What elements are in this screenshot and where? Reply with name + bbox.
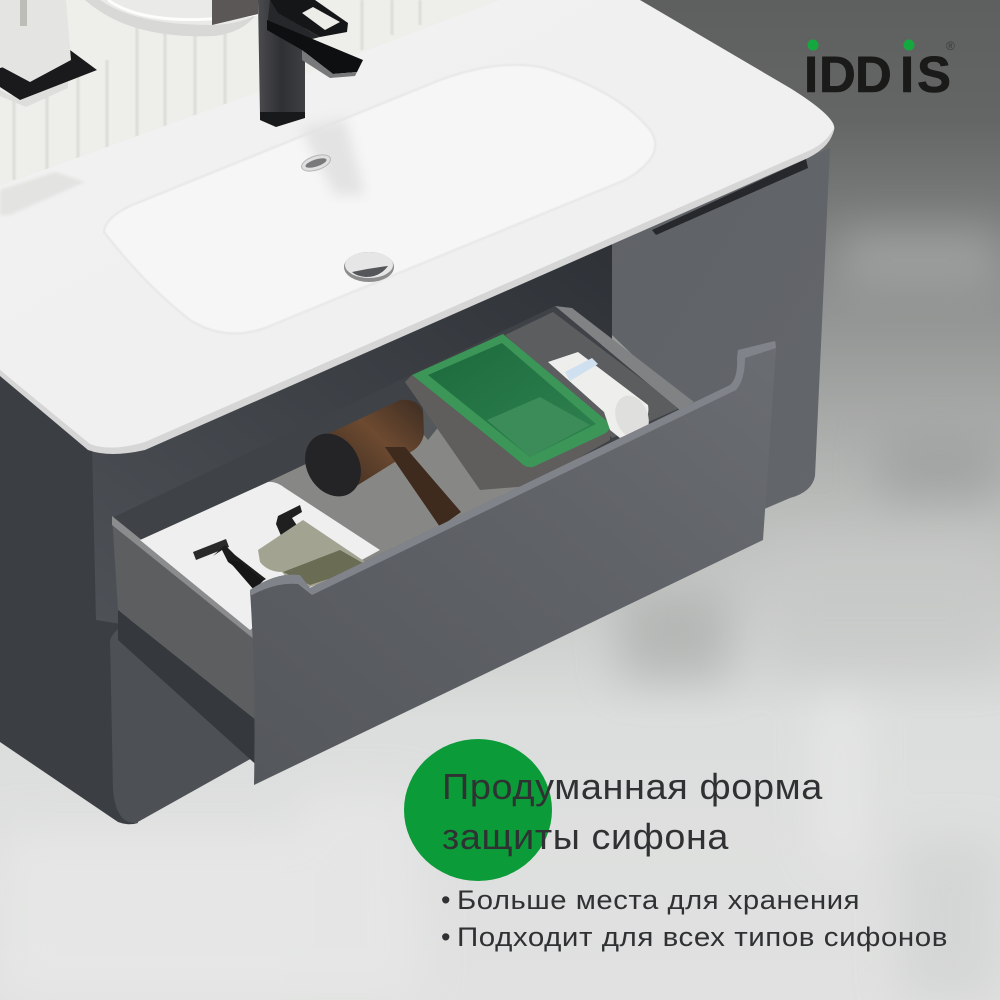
bullet list [441,885,948,952]
logo IDDIS: IDDIS [804,46,951,103]
hair dryer [294,400,461,527]
bullet list: • [441,885,450,915]
rolled towel [548,352,655,443]
heading [442,766,823,857]
basin [104,65,655,333]
drawer front top edge [250,341,776,596]
faucet [258,0,363,127]
cabinet lower drawer [110,625,270,823]
interior back wall [112,306,680,625]
razor [193,539,266,590]
storage box green [405,334,610,490]
faucet shadow [300,118,365,195]
counter edge shadow [0,128,834,454]
drawer left side panel [112,516,260,725]
cabinet right body [612,148,830,510]
soap dispenser holder [0,0,97,107]
drawer right wall [505,312,680,438]
drawer floor [145,410,550,625]
counter surface [0,0,834,452]
soap shadow [0,172,85,215]
bottle pump [276,505,302,538]
heading: Продуманная форма [442,766,823,807]
bullet list: Подходит для всех типов сифонов [457,922,948,952]
countertop and backsplash [0,0,834,454]
bullet list: • [441,922,450,952]
bottle [258,520,370,587]
underside cavity below counter [92,240,612,625]
green accent circle [404,739,552,881]
cabinet left body [0,372,138,824]
drain [344,252,394,282]
back wall tiles [0,0,520,190]
towel with razor and bottle [140,482,380,630]
overflow [300,152,332,174]
heading: защиты сифона [442,816,729,857]
drawer interior [112,306,694,770]
drawer front panel [250,341,776,785]
bullet list: Больше места для хранения [457,885,860,915]
door handle groove [652,159,808,235]
round mirror [85,0,258,36]
logo IDDIS: ® [946,39,955,53]
